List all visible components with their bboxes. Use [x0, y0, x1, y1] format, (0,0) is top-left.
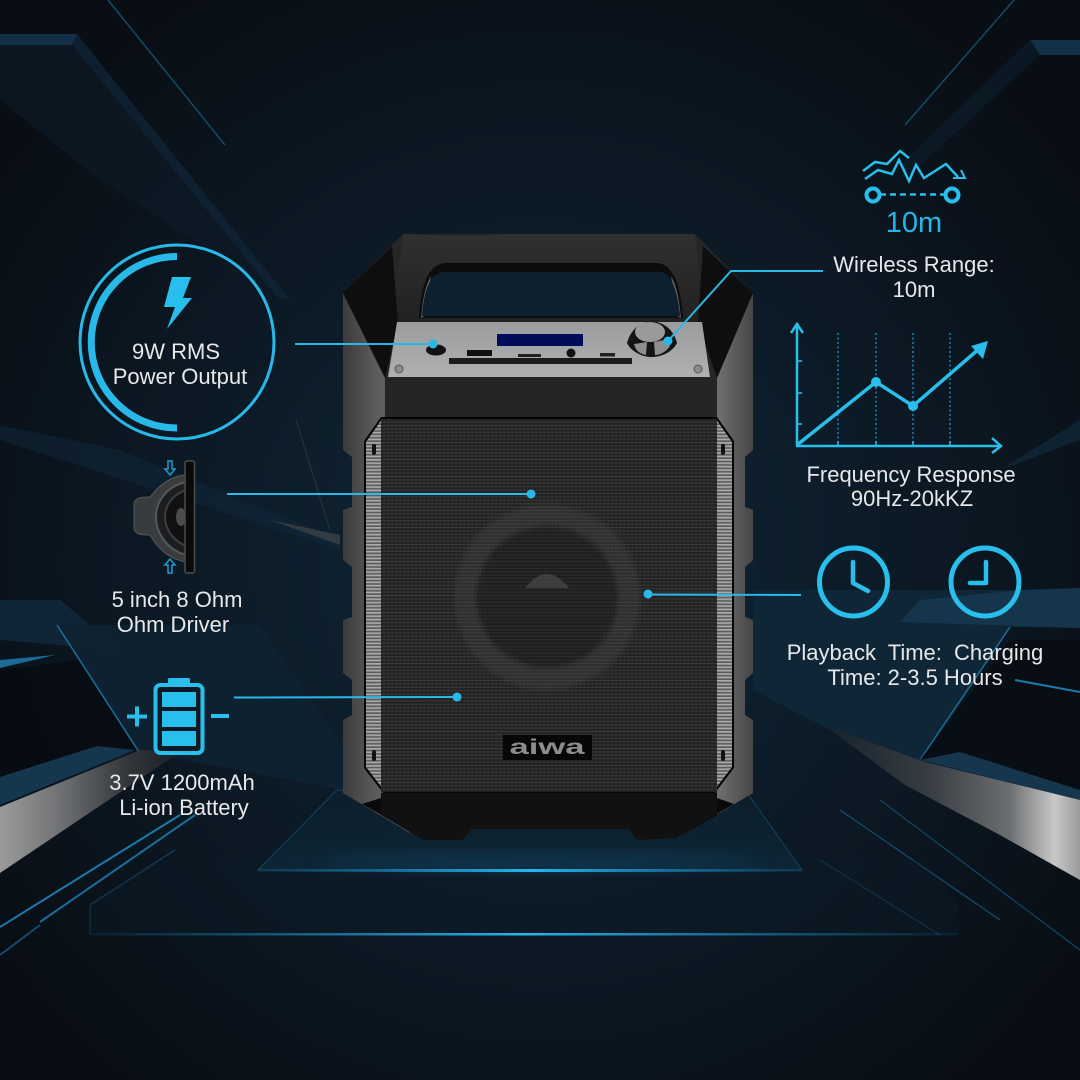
driver label: 5 inch 8 Ohm: [112, 587, 242, 612]
aiwa logo: aiwa: [510, 736, 585, 759]
volume knob: [627, 321, 677, 357]
frequency response label: Frequency Response: [806, 462, 1016, 487]
speaker body shell: [343, 234, 753, 840]
carrying handle: [343, 234, 753, 378]
icon: lightning bolt: [164, 277, 192, 329]
icon: range waves: [863, 151, 965, 202]
icon: battery: [127, 678, 229, 753]
wireless range label: Wireless Range:: [833, 252, 995, 277]
callout: wireless range: [833, 151, 995, 302]
chart: frequency response: [791, 324, 1001, 453]
frequency response label: [806, 462, 1016, 511]
range value: 10m: [886, 207, 942, 239]
battery label: [109, 770, 255, 820]
speaker grille: [364, 417, 734, 794]
floor platform: [90, 790, 958, 936]
leader line: battery: [234, 692, 462, 702]
playback and charging label: Playback Time: Charging: [787, 640, 1043, 665]
product: aiwa speaker: [343, 234, 753, 840]
power output label: Power Output: [113, 364, 247, 389]
power output label: [113, 339, 247, 389]
icon: speaker driver: [134, 461, 194, 573]
leader line: playback time: [644, 590, 801, 598]
wireless range label: 10m: [893, 277, 935, 302]
frequency response label: 90Hz-20kKZ: [851, 486, 973, 511]
driver label: [112, 587, 242, 637]
control panel: [388, 321, 710, 377]
callout: playback and charging time: [787, 548, 1043, 690]
icon: charging clock: [951, 548, 1019, 616]
battery label: 3.7V 1200mAh: [109, 770, 255, 795]
callout: power output: [80, 245, 274, 439]
icon: playback clock: [820, 548, 888, 616]
leader line: power output: [295, 340, 438, 348]
playback and charging label: Time: 2-3.5 Hours: [827, 665, 1003, 690]
driver label: Ohm Driver: [117, 612, 229, 637]
callout: battery: [109, 678, 255, 820]
callout: driver: [112, 461, 242, 637]
power output label: 9W RMS: [132, 339, 220, 364]
battery label: Li-ion Battery: [119, 795, 249, 820]
wireless range label: [833, 252, 995, 302]
playback and charging label: [787, 640, 1043, 690]
leader line: driver: [227, 490, 536, 498]
aiwa logo: [503, 735, 592, 760]
leader line: wireless range: [664, 271, 823, 346]
